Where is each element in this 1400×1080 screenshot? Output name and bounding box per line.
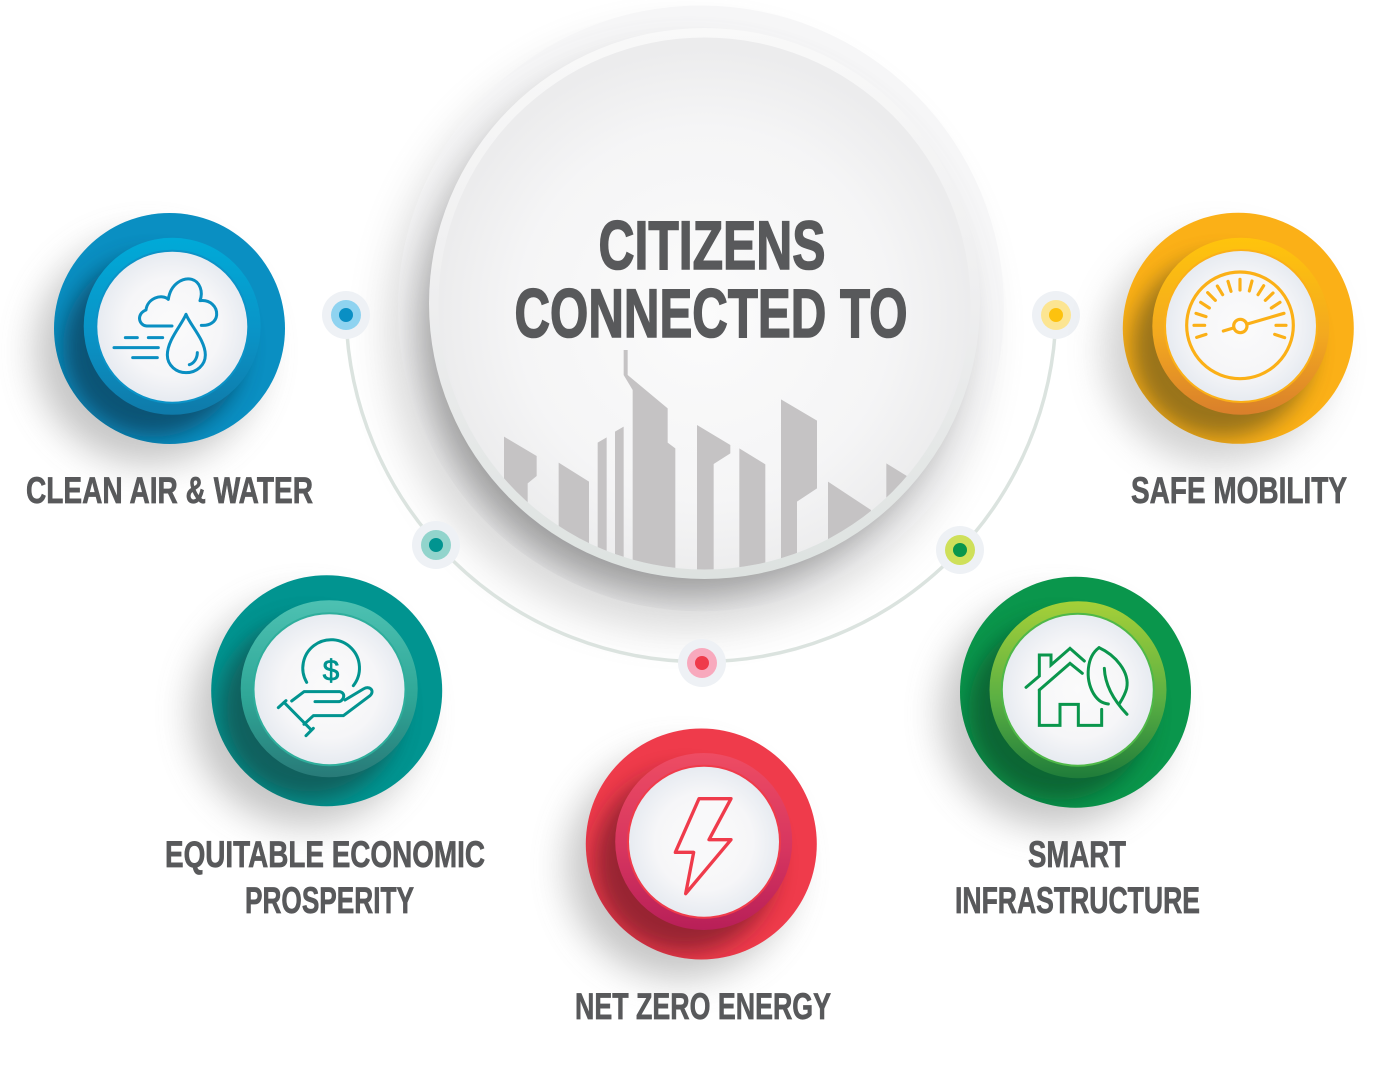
label: clean air and water: CLEAN AIR & WATER [26, 470, 313, 511]
label: equitable economic prosperity: EQUITABLE ECONOMIC [165, 834, 485, 875]
icon: house and leaf [1026, 648, 1127, 725]
panel: equitable economic prosperity [192, 575, 442, 826]
icon: cloud and water drop [114, 279, 217, 373]
label: net zero energy: NET ZERO ENERGY [575, 986, 831, 1027]
connector dot: green [936, 526, 984, 574]
panel: smart infrastructure [941, 577, 1191, 827]
label: equitable economic prosperity: PROSPERITY [245, 880, 414, 921]
title: CONNECTED TO [514, 275, 908, 352]
connector dot: red [678, 639, 726, 687]
label: equitable economic prosperity [165, 834, 485, 921]
panel: central circle [388, 6, 1004, 630]
label: smart infrastructure [955, 834, 1200, 921]
connector dot: yellow [1032, 291, 1080, 339]
panel: clean air and water [35, 213, 285, 464]
panel: safe mobility [1104, 213, 1354, 464]
connector dot: blue [322, 291, 370, 339]
icon: hand holding coin: $ [323, 654, 340, 687]
icon: speedometer [1187, 272, 1293, 379]
connector dot: teal [412, 521, 460, 569]
city skyline [504, 350, 913, 580]
label: smart infrastructure: INFRASTRUCTURE [955, 880, 1200, 921]
icon: lightning bolt [675, 799, 731, 894]
title: CITIZENS [598, 207, 826, 284]
panel: net zero energy [567, 728, 817, 979]
title [514, 207, 908, 352]
icon: hand holding coin [278, 640, 372, 736]
connector arc [346, 315, 1056, 662]
label: smart infrastructure: SMART [1028, 834, 1126, 875]
